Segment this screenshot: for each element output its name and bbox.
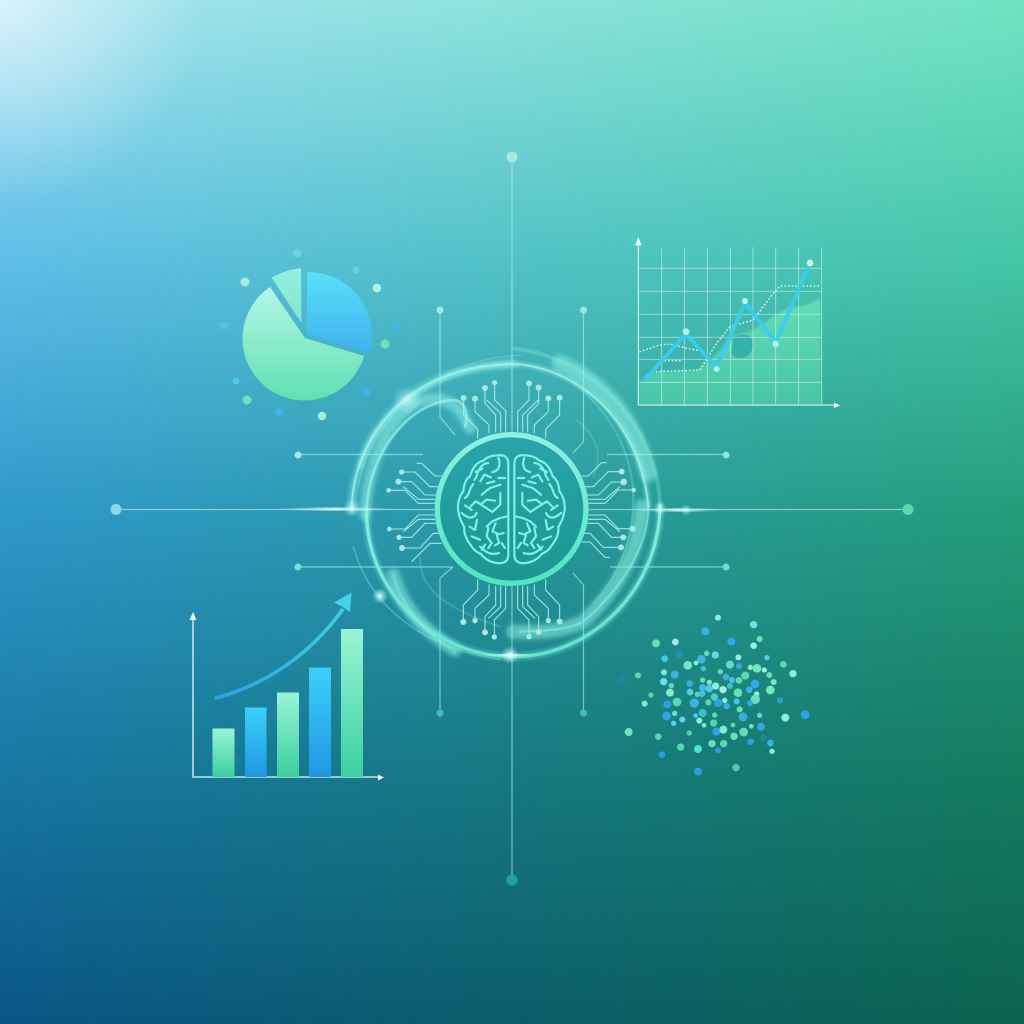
right hemisphere (514, 455, 565, 563)
orbiting dots (220, 249, 401, 420)
main trend line (648, 263, 810, 377)
brain medallion (437, 435, 586, 583)
connector end nodes (110, 152, 914, 886)
swirl rings (352, 348, 660, 659)
area fill (639, 298, 822, 405)
spiral A outer stroke (352, 364, 648, 510)
pie slice: large green (243, 287, 364, 401)
line markers (645, 260, 813, 380)
spiral B upper-left return (367, 400, 466, 510)
light flares (275, 385, 725, 664)
circuit nodes (386, 380, 636, 640)
line chart (635, 237, 840, 408)
brain icon (458, 455, 565, 563)
bars (212, 728, 234, 777)
circuit traces (389, 383, 634, 637)
central brain emblem with swirl (352, 348, 660, 659)
crosshair connector lines (116, 157, 908, 880)
spiral B lower glow (367, 505, 660, 657)
spiral A descending band (520, 507, 648, 632)
axes (638, 243, 835, 405)
pie slice: blue (307, 272, 372, 353)
pie chart (220, 249, 401, 420)
left hemisphere (458, 455, 508, 563)
axes (193, 618, 378, 777)
scatter plot cluster (619, 615, 810, 776)
spiral A glow (360, 364, 648, 507)
spiral B upper-right return (513, 348, 660, 505)
pie slice: light green (272, 268, 302, 323)
soft swirl bands (352, 363, 648, 650)
growth arrow (214, 592, 352, 698)
bar chart (190, 592, 384, 780)
dark highlight blob (732, 335, 753, 358)
grid (638, 247, 822, 405)
dotted series (640, 286, 820, 372)
spiral B lower arc (367, 505, 660, 657)
